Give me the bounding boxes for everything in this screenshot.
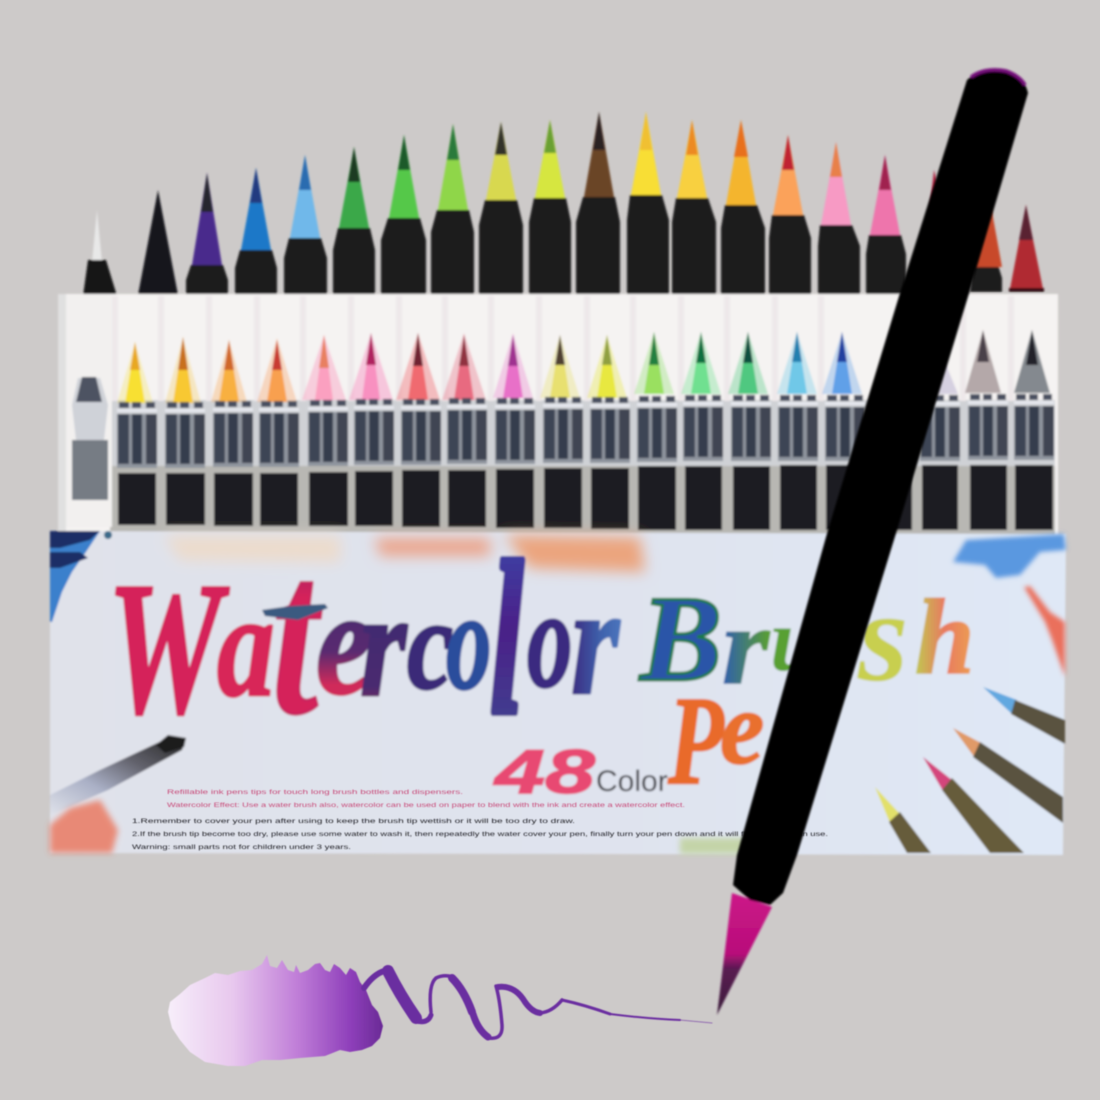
pen: green [333, 147, 375, 294]
badge: 48 Color: Color [596, 765, 668, 798]
heading: Watercolor: o [527, 561, 572, 717]
pen: golden [672, 120, 716, 294]
vertical reflections [112, 296, 1014, 401]
watercolor splash: top right blue [953, 534, 1066, 578]
brush stroke swatch [168, 955, 712, 1066]
color blob [168, 955, 383, 1066]
watercolor wash: top peach [165, 535, 645, 572]
black note lines [132, 818, 828, 851]
pen: mint [681, 332, 723, 530]
heading: Brush: r [722, 586, 770, 708]
badge: 48 Color: 48 [493, 738, 595, 807]
heading: Pen: n [772, 693, 816, 781]
pen: yellow [117, 342, 157, 525]
pen: brown [576, 112, 620, 294]
pen: purple [186, 173, 228, 294]
heading: Watercolor [107, 508, 620, 762]
pen body [733, 68, 1028, 905]
black note lines: 2.If the brush tip become too dry, please use some water to wash it, then repeatedly the water cover your pen, finally turn your pen down and it will flow, so you can use. [132, 831, 828, 838]
back row of brush pens [83, 112, 1044, 296]
heading: Brush: B [638, 570, 722, 707]
pen: yellow green [587, 335, 630, 529]
pink note lines: Watercolor Effect: Use a water brush also, watercolor can be used on paper to blend with the ink and create a watercolor effect. [167, 802, 685, 809]
heading: Pen: e [720, 671, 764, 787]
brush: yellow tip [875, 787, 931, 853]
pen: hidden lilac [918, 345, 960, 530]
brush: orange tip [953, 728, 1063, 823]
pen: blue [235, 168, 277, 294]
pen: emerald [728, 332, 771, 530]
pen set artwork [50, 112, 1066, 855]
watercolor splash: bottom left orange [50, 800, 118, 853]
watercolor splash: top left blue [50, 531, 112, 622]
heading: Brush: u [770, 591, 820, 690]
crossbar of t [262, 604, 328, 620]
pen: dark red [1009, 205, 1044, 292]
pen: orange [211, 340, 253, 526]
squiggle line [364, 970, 712, 1038]
pen: sky [777, 332, 818, 530]
water brush [66, 295, 112, 527]
pen: light green [634, 332, 677, 530]
pen: blue [822, 332, 865, 530]
pink note lines: Refillable ink pens tips for touch long brush bottles and dispensers. [167, 789, 463, 796]
pen: hidden violet [873, 332, 913, 530]
brush: blue tip [983, 687, 1065, 744]
pen: pale yellow [540, 335, 583, 528]
pen: bright green [381, 135, 426, 294]
heading: Brush: s [857, 565, 909, 709]
pen: rose [442, 333, 487, 527]
pen: crimson [918, 170, 960, 294]
panel card [50, 531, 1066, 855]
pen: rust [970, 190, 1002, 292]
pen: yellow [627, 112, 669, 294]
black note lines: 1.Remember to cover your pen after using to keep the brush tip wettish or it will be too dry to draw. [132, 818, 575, 825]
pen: light pink [302, 335, 348, 526]
black note lines: Warning: small parts not for children under 3 years. [132, 844, 351, 851]
pen: red pink [396, 333, 441, 527]
badge: 48 Color [493, 738, 668, 807]
pen: pink [818, 142, 860, 294]
pen: gold [165, 337, 205, 525]
heading: Watercolor: W [107, 544, 229, 754]
pen: yellow green [529, 120, 571, 294]
brush: pink tip [923, 757, 1024, 853]
pen: clear water brush [83, 210, 117, 296]
heading: Watercolor: r [571, 556, 620, 727]
pen tip [717, 893, 772, 1015]
heading: Watercolor: l [490, 519, 523, 760]
pen: peach [769, 135, 811, 294]
heading: Watercolor: a [217, 563, 275, 727]
pen: lime [431, 124, 474, 294]
illustration: brush at left [50, 735, 186, 815]
pen: pink [349, 333, 394, 526]
instructions text [132, 789, 828, 851]
heading: Watercolor: e [316, 560, 373, 726]
pink note lines [167, 789, 685, 809]
heading: Brush: h [915, 579, 975, 697]
pen end cap [971, 70, 1025, 85]
pen: warm gray [965, 330, 1008, 530]
heading: Pen: P [667, 669, 725, 811]
large brush pen [717, 68, 1028, 1015]
pen: black [138, 190, 178, 295]
pen: light blue [284, 155, 327, 294]
heading: Watercolor: r [360, 562, 408, 728]
heading: Watercolor: t [272, 508, 322, 762]
heading: Watercolor: o [446, 563, 491, 719]
illustration: brush tips fan [875, 687, 1065, 853]
pen: magenta [493, 333, 535, 528]
pen: rose [866, 155, 906, 294]
front packaging panel [50, 508, 1066, 855]
pen: coral [257, 338, 299, 526]
pen: amber [721, 120, 765, 294]
watercolor splash: right coral [1024, 586, 1065, 677]
heading: Watercolor: c [407, 573, 453, 717]
heading: Brush [638, 565, 975, 709]
heading: Pen [667, 669, 816, 811]
clear box interior [58, 294, 1058, 534]
watercolor wash: bottom green [680, 838, 750, 854]
pen: dark gray [1014, 330, 1054, 530]
pen: olive yellow [479, 122, 523, 294]
front row of brush pens [66, 295, 1054, 530]
